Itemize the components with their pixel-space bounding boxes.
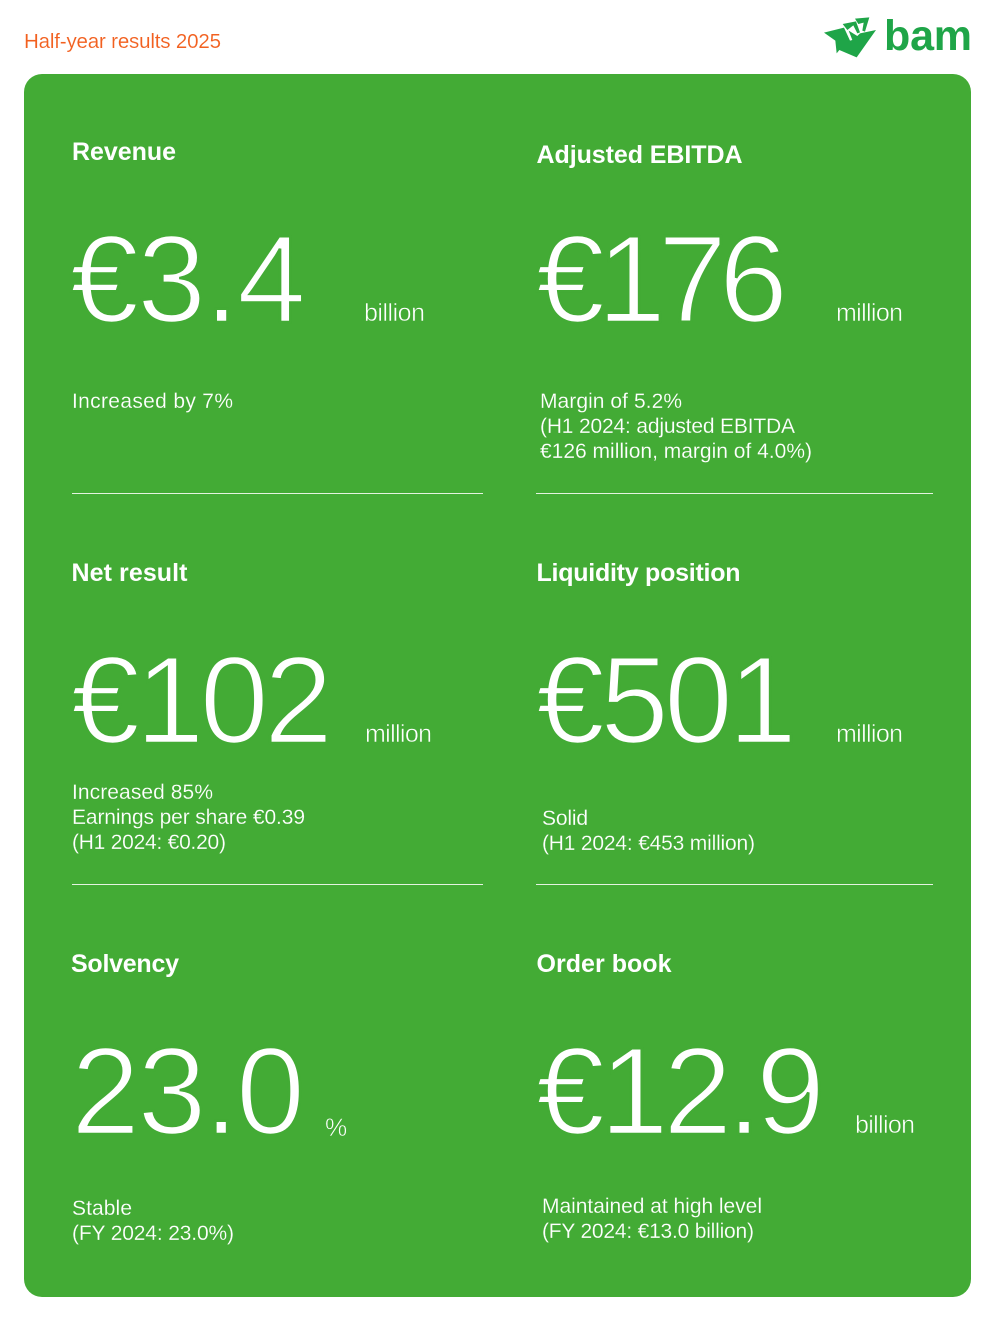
text: solvency note: Stable [72, 1197, 132, 1220]
panel: order book [536, 950, 915, 1243]
text: liquidity note: Solid [542, 807, 588, 830]
heading: revenue: Revenue [72, 138, 176, 166]
figure: revenue value: €3.4 [70, 211, 306, 349]
panel: solvency [71, 950, 347, 1245]
wordmark: bam [884, 12, 972, 60]
text: net result note: Earnings per share €0.39 [72, 806, 305, 829]
heading: net result: Net result [72, 559, 188, 587]
figure: net result value: €102 [71, 632, 333, 770]
text: net result note: Increased 85% [72, 781, 213, 804]
text: order book note: Maintained at high level [542, 1195, 762, 1218]
text: EBITDA note: €126 million, margin of 4.0%) [540, 440, 812, 463]
logo: bam [824, 12, 972, 60]
unit: billion: billion [855, 1111, 915, 1139]
text: EBITDA note: Margin of 5.2% [540, 390, 682, 413]
text: net result note: (H1 2024: €0.20) [72, 831, 226, 854]
panel: net result [71, 559, 432, 854]
panel: revenue [70, 138, 425, 413]
figure: EBITDA value: €176 [536, 211, 788, 349]
text: revenue note: Increased by 7% [72, 390, 233, 413]
heading: half-year results: Half-year results 2025 [24, 30, 221, 53]
unit: million: million [365, 720, 432, 748]
heading: liquidity position: Liquidity position [536, 559, 740, 587]
unit: million: million [836, 299, 903, 327]
heading: adjusted EBITDA: Adjusted EBITDA [536, 141, 742, 169]
text: net result note [72, 781, 305, 854]
text: EBITDA note [540, 390, 812, 463]
panel: adjusted EBITDA [536, 141, 903, 463]
figure: solvency value: 23.0 [71, 1023, 305, 1161]
icon: bam arrow mark [824, 17, 876, 57]
text: solvency note: (FY 2024: 23.0%) [72, 1222, 234, 1245]
text: liquidity note: (H1 2024: €453 million) [542, 832, 755, 855]
heading: order book: Order book [536, 950, 672, 978]
text: order book note: (FY 2024: €13.0 billion) [542, 1220, 754, 1243]
text: liquidity note [542, 807, 755, 855]
text: order book note [542, 1195, 762, 1243]
unit: billion: billion [364, 299, 425, 327]
unit: million: million [836, 720, 903, 748]
text: solvency note [72, 1197, 234, 1245]
unit: percent: % [325, 1114, 347, 1142]
figure: order book value: €12.9 [536, 1023, 825, 1161]
panel: liquidity position [536, 559, 903, 855]
text: EBITDA note: (H1 2024: adjusted EBITDA [540, 415, 795, 438]
figure: liquidity value: €501 [536, 632, 797, 770]
heading: solvency: Solvency [71, 950, 179, 978]
